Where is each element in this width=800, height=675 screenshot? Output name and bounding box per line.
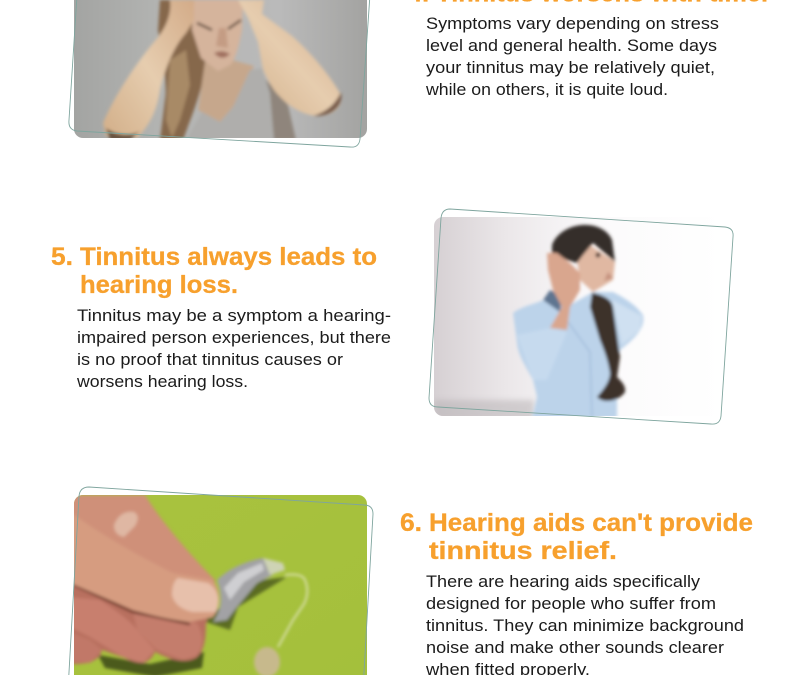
back finger [74,495,214,580]
text: myth 6 body: noise and make other sounds clearer [426,638,724,657]
photo: hearing aid held in fingers [70,495,367,675]
text: myth 6 body: designed for people who suffer from [426,594,716,613]
shirt [513,292,643,418]
text: myth 4 body: your tinnitus may be relatively quiet, [426,58,715,77]
hearing aid body [213,558,273,622]
heading: myth 6 [400,509,753,565]
text: myth 4 body: while on others, it is quite loud. [425,80,668,99]
heading: myth 6: Hearing aids can't provide [429,509,753,537]
heading: myth 6: tinnitus relief. [429,537,617,565]
hand base [74,580,215,666]
torso shadow [266,80,297,138]
hand and forearm [547,253,580,330]
text: myth 4 body [425,14,719,99]
outline frame: photo 1 [69,0,371,147]
text: myth 6 body: There are hearing aids specifically [426,572,701,591]
lower fingers [70,597,155,663]
heading: myth 5: Tinnitus always leads to [80,243,377,271]
photo: stressed woman holding her head [74,0,367,140]
text: myth 6 body [425,572,744,675]
text: myth 5 body: is no proof that tinnitus causes or [77,350,343,369]
outline frame: photo 2 [429,209,733,424]
heading: myth 5: hearing loss. [80,271,238,299]
tube and ear dome [278,575,307,647]
text: myth 5 body: worsens hearing loss. [76,372,248,391]
braid [590,293,625,401]
hair [158,0,207,140]
face [577,243,615,292]
right arm [238,0,341,116]
shadows [98,652,204,675]
text: myth 4 body: level and general health. Some days [426,36,717,55]
heading: myth 5 [51,243,377,299]
text: myth 6 body: tinnitus. They can minimize background [426,616,744,635]
tank top [186,68,274,140]
chest [198,60,254,122]
outline frame: photo 3 [68,487,373,675]
hair [552,225,615,263]
thumb [70,512,219,622]
heading: myth 5: 5. [51,243,73,271]
heading: myth 6: 6. [400,509,422,537]
text: myth 4 body: Symptoms vary depending on stress [426,14,719,33]
text: myth 5 body: impaired person experiences, but there [77,328,391,347]
finger crease shadow [72,584,190,624]
text: myth 5 body: Tinnitus may be a symptom a hearing- [77,306,391,325]
text: myth 5 body [76,306,391,391]
left arm [103,0,194,138]
photo: woman cupping her ear [434,217,646,416]
face [192,0,243,71]
